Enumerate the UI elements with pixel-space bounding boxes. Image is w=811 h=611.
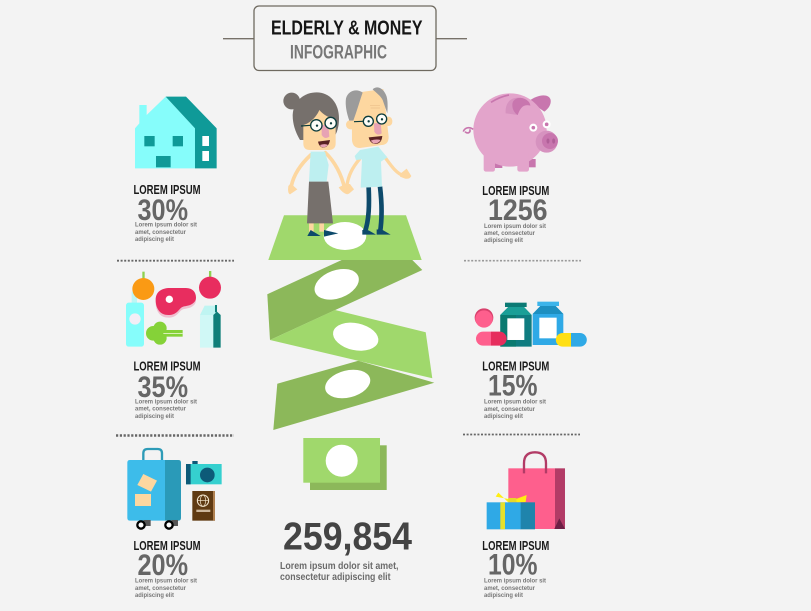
icon: house: [135, 97, 217, 168]
stat: travel 20%: amet, consectetur: [135, 585, 186, 592]
stat: housing 30%: LOREM IPSUM: [134, 183, 200, 197]
stat: medicine 15%: 15%: [488, 370, 538, 403]
stat: savings 1256: LOREM IPSUM: [482, 184, 549, 198]
stat: housing 30%: Lorem ipsum dolor sit: [135, 222, 198, 229]
stat: food 35%: amet, consectetur: [135, 406, 186, 413]
stat: shopping 10%: LOREM IPSUM: [482, 539, 549, 553]
stat: travel 20%: Lorem ipsum dolor sit: [135, 578, 198, 585]
stat: medicine 15%: adipiscing elit: [484, 413, 524, 420]
stat: medicine 15%: LOREM IPSUM: [482, 360, 549, 374]
stat: food 35%: adipiscing elit: [135, 413, 175, 420]
stat: food 35%: LOREM IPSUM: [134, 360, 200, 374]
woman: [283, 92, 353, 237]
total figure: 259,854: [283, 515, 413, 558]
stat: food 35%: [134, 360, 200, 420]
stat: shopping 10%: Lorem ipsum dolor sit: [484, 578, 547, 585]
illustration: elderly couple: [283, 87, 411, 237]
stat: shopping 10%: adipiscing elit: [484, 592, 524, 599]
stat: shopping 10%: [482, 539, 549, 599]
icon: piggy bank: [463, 93, 558, 172]
stat: housing 30%: 30%: [138, 194, 188, 227]
stat: travel 20%: [134, 539, 200, 599]
stat: housing 30%: amet, consectetur: [135, 229, 186, 236]
total figure: consectetur adipiscing elit: [280, 572, 391, 583]
stat: savings 1256: adipiscing elit: [484, 237, 524, 244]
man: [345, 87, 411, 235]
stat: food 35%: Lorem ipsum dolor sit: [135, 398, 198, 406]
stat: savings 1256: amet, consectetur: [484, 230, 535, 237]
stat: savings 1256: [482, 184, 549, 244]
title: [223, 6, 467, 70]
stat: shopping 10%: 10%: [488, 548, 538, 582]
stat: medicine 15%: Lorem ipsum dolor sit: [484, 399, 547, 406]
stat: savings 1256: Lorem ipsum dolor sit: [484, 223, 547, 230]
icon: food: [126, 271, 221, 348]
money ribbon: [267, 215, 434, 430]
icon: shopping bag and gift: [487, 452, 565, 529]
stat: travel 20%: adipiscing elit: [135, 592, 175, 599]
stat: savings 1256: 1256: [488, 194, 548, 227]
stat: food 35%: 35%: [138, 371, 188, 404]
total figure: [280, 515, 413, 583]
stat: medicine 15%: [482, 360, 549, 420]
stat: medicine 15%: amet, consectetur: [484, 406, 535, 413]
total figure: Lorem ipsum dolor sit amet,: [280, 561, 399, 572]
stat: housing 30%: adipiscing elit: [135, 236, 175, 243]
stat: shopping 10%: amet, consectetur: [484, 585, 535, 592]
title: INFOGRAPHIC: [290, 42, 387, 64]
title: ELDERLY & MONEY: [271, 18, 423, 40]
icon: medicine: [475, 302, 587, 347]
icon: travel: [127, 449, 222, 529]
stat: travel 20%: LOREM IPSUM: [134, 539, 200, 553]
stat: housing 30%: [134, 183, 200, 243]
icon: banknote: [303, 438, 387, 490]
stat: travel 20%: 20%: [138, 549, 188, 582]
